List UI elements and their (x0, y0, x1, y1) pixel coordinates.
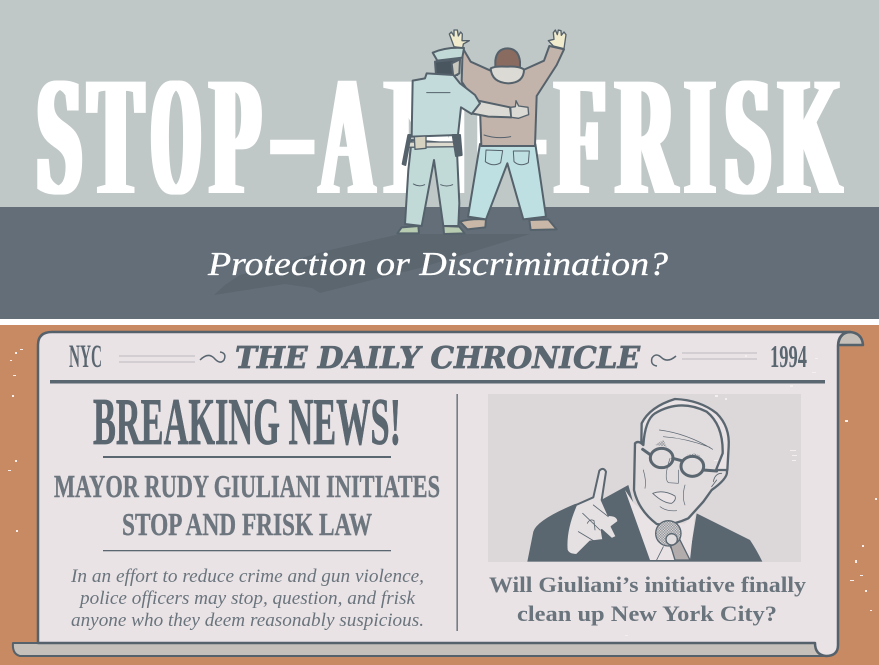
masthead rule left (119, 356, 195, 362)
body text: In an effort to reduce crime and gun violence, (70, 566, 424, 587)
title: N (385, 42, 472, 230)
scroll right curl (838, 332, 863, 345)
sub-headline: MAYOR RUDY GIULIANI INITIATES (54, 468, 440, 504)
sky background (0, 0, 879, 207)
title: S (725, 42, 771, 230)
title: - (269, 36, 316, 224)
illustration: officer frisking suspect (397, 30, 566, 234)
face (634, 405, 727, 525)
paper sheet (38, 332, 850, 656)
title: O (152, 42, 200, 230)
flourish left (200, 352, 225, 362)
body text: police officers may stop, question, and frisk (78, 588, 416, 609)
year: 1994 (770, 338, 807, 374)
newspaper name: THE DAILY CHRONICLE (235, 341, 641, 376)
microphone (656, 521, 690, 560)
illustration: Giuliani pointing (527, 399, 762, 562)
photo background (488, 394, 801, 562)
title: R (617, 42, 676, 230)
sub-headline: STOP AND FRISK LAW (122, 506, 372, 542)
title: T (89, 42, 143, 230)
pointing hand (566, 469, 618, 555)
masthead: NYC (69, 339, 102, 375)
body text: anyone who they deem reasonably suspicious. (71, 610, 424, 631)
scroll bottom roll (13, 643, 825, 656)
orange background (0, 325, 879, 665)
right article (488, 394, 807, 626)
headline: BREAKING NEWS! (93, 385, 401, 459)
paper speckle (8, 349, 877, 636)
panel: header scene (0, 0, 879, 319)
flourish right (652, 355, 676, 366)
caption: Will Giuliani’s initiative finally (489, 572, 807, 597)
figure shadow (214, 234, 530, 295)
masthead rule right (682, 353, 757, 359)
left article (54, 385, 440, 631)
column divider (456, 394, 458, 631)
caption: clean up New York City? (517, 601, 777, 626)
panel: newspaper section (0, 325, 879, 665)
masthead rule (50, 380, 825, 384)
title: F (556, 42, 605, 230)
title: S (37, 42, 82, 230)
rule under sub-headline (103, 550, 391, 551)
title: I (686, 42, 714, 230)
ground (0, 207, 879, 319)
subtitle: Protection or Discrimination? (207, 246, 668, 283)
title: P (211, 42, 260, 230)
title: A (320, 42, 374, 230)
suit (527, 485, 762, 562)
suspect (449, 30, 566, 230)
title: D (479, 42, 495, 230)
hair and ears (640, 399, 729, 473)
glasses (643, 448, 717, 476)
officer (397, 48, 529, 234)
title: - (501, 36, 548, 224)
newspaper scroll (13, 332, 863, 656)
masthead (50, 338, 825, 384)
shirt and tie (625, 490, 695, 560)
rule under headline (103, 456, 391, 458)
